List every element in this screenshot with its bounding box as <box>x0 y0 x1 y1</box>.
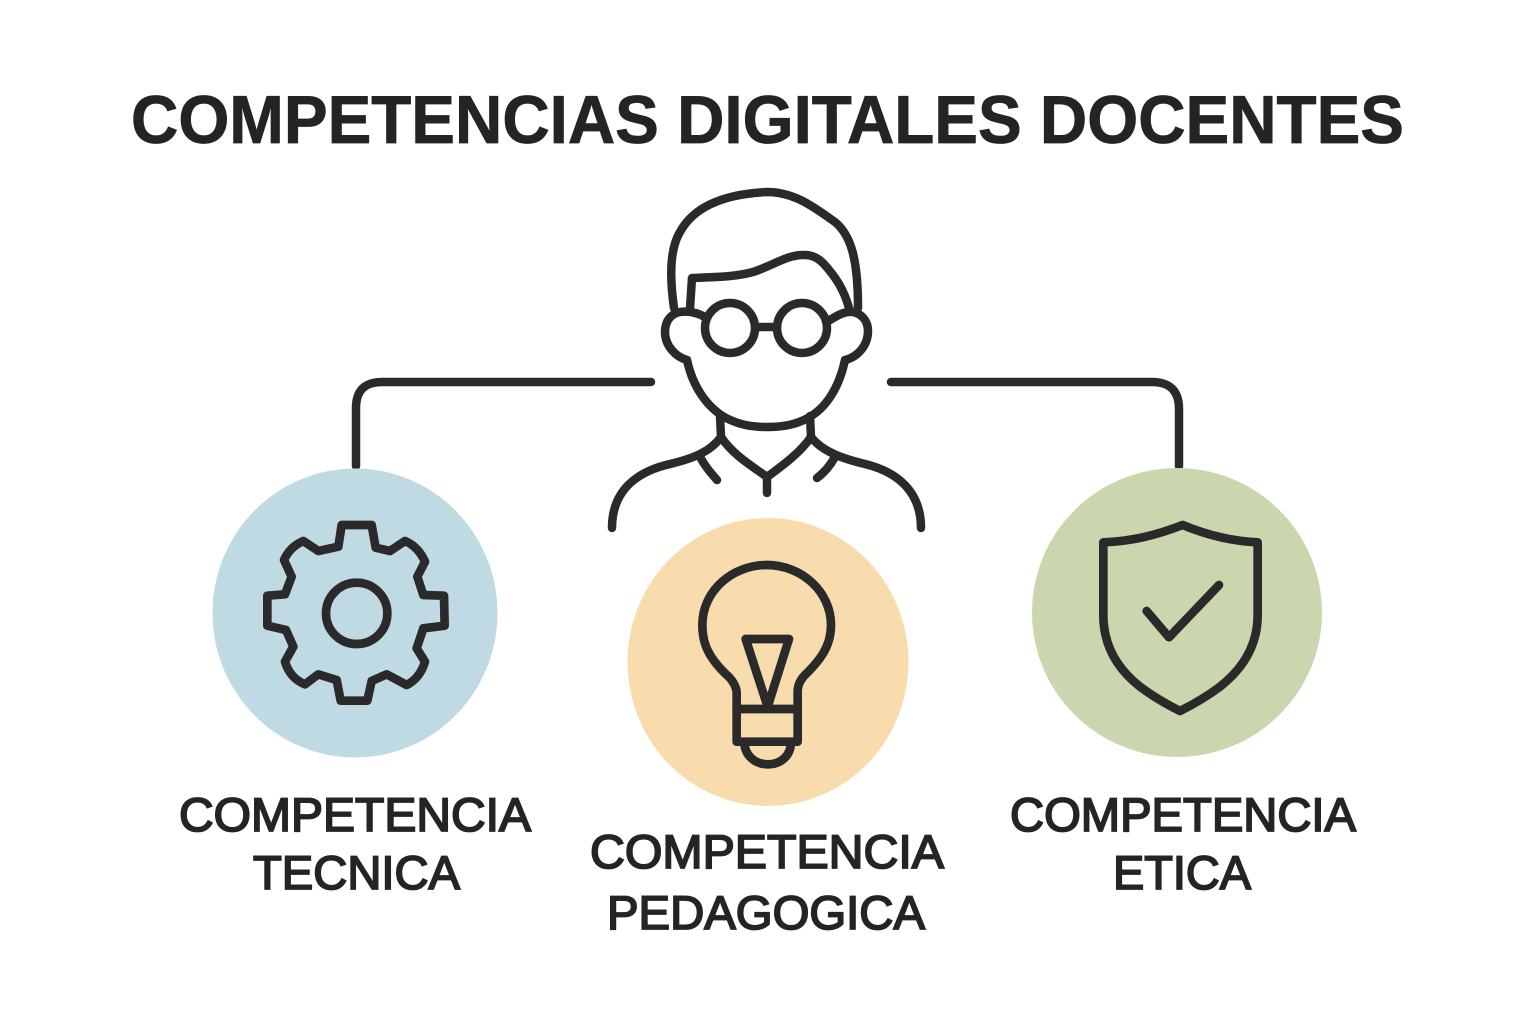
green circle <box>1032 468 1322 757</box>
label: competencia pedagogica: COMPETENCIA <box>590 825 945 878</box>
label: competencia tecnica <box>179 788 532 899</box>
panel: competencia tecnica <box>179 468 532 899</box>
icon: shield with check <box>1103 525 1258 711</box>
icon: light bulb <box>702 565 831 764</box>
label: competencia tecnica: COMPETENCIA <box>179 788 532 841</box>
right connector <box>891 382 1179 466</box>
label: competencia pedagogica: PEDAGOGICA <box>607 886 926 939</box>
label: competencia etica: ETICA <box>1113 846 1252 899</box>
label: competencia pedagogica <box>590 825 945 939</box>
label: competencia etica: COMPETENCIA <box>1010 788 1357 841</box>
icon: gear <box>267 525 445 701</box>
panel: competencia pedagogica <box>590 518 945 939</box>
title: COMPETENCIAS DIGITALES DOCENTES <box>131 82 1404 158</box>
label: competencia etica <box>1010 788 1357 899</box>
panel: competencia etica <box>1010 468 1357 899</box>
left connector <box>356 382 651 466</box>
orange circle <box>628 518 908 806</box>
blue circle <box>212 468 498 758</box>
label: competencia tecnica: TECNICA <box>253 846 461 899</box>
icon: teacher with glasses <box>612 192 921 528</box>
